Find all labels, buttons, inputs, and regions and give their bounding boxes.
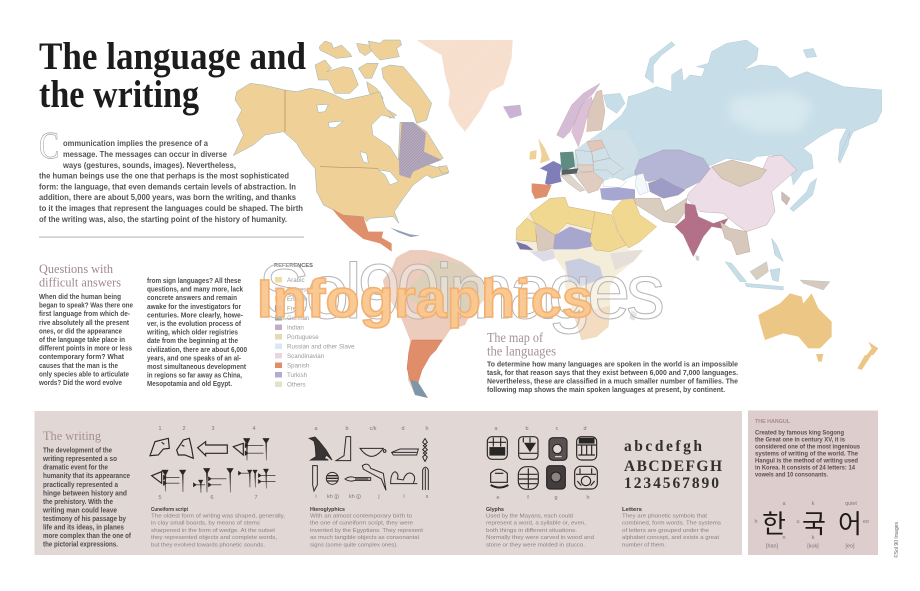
labels: cuneiform numbers: 4 bbox=[252, 426, 256, 432]
labels: Hangul phonetics: [kuk] bbox=[807, 544, 819, 550]
text: glyphs: represent a word, a syllable or, even, bbox=[486, 521, 586, 527]
text: glyphs: Normally they were carved in wood and bbox=[486, 535, 594, 541]
labels: glyph letters bbox=[494, 426, 590, 501]
icon: hieroglyphs bbox=[309, 437, 428, 491]
legend: references: German bbox=[287, 315, 310, 322]
copyright credit: ©Sol 90 Images bbox=[893, 522, 900, 558]
text: writing description: writing man could leave bbox=[42, 508, 117, 514]
text: hieroglyphics: signs (some quite complex ones). bbox=[310, 542, 398, 548]
labels: cuneiform numbers: 3 bbox=[212, 426, 214, 432]
text: Hangul description: vowels and 10 consonants. bbox=[755, 472, 828, 479]
panel: questions with difficult answers: centuries. More clearly, howe- bbox=[147, 312, 244, 319]
intro text bbox=[39, 125, 303, 224]
map: Eastern Europe bbox=[560, 130, 640, 201]
panel: questions with difficult answers bbox=[38, 261, 247, 388]
text: cuneiform script: in clay small boards, by means of stems bbox=[151, 521, 260, 527]
specimen: alphabet letters: abcdefgh bbox=[624, 438, 702, 455]
heading: the writing: The writing bbox=[43, 429, 102, 443]
panel: questions with difficult answers: of the language take place in bbox=[39, 337, 125, 344]
labels: Hangul phonetics: k bbox=[812, 501, 815, 507]
labels: hieroglyph sounds: b bbox=[346, 426, 348, 432]
text: hieroglyphics: With an almost contemporary birth to bbox=[310, 514, 412, 520]
panel: questions with difficult answers: ver, is the evolution process of bbox=[147, 321, 242, 328]
text: cuneiform script: but they evolved towards phonetic sounds. bbox=[151, 542, 265, 548]
panel: questions with difficult answers: contemporary form? What bbox=[39, 354, 125, 361]
labels: Hangul phonetics: k bbox=[812, 535, 815, 541]
labels: hieroglyph sounds: l bbox=[403, 494, 405, 500]
heading: map bbox=[487, 330, 556, 358]
text: writing description bbox=[42, 448, 132, 548]
text: glyphs: Glyphs bbox=[486, 507, 504, 513]
labels: glyph letters: d bbox=[584, 426, 586, 432]
panel: questions with difficult answers: concrete answers and remain bbox=[147, 295, 237, 302]
panel: the writing bbox=[34, 411, 742, 555]
text: cuneiform script: they represented objects and complete words, bbox=[151, 535, 277, 541]
legend: references: Portuguese bbox=[287, 334, 319, 341]
text: glyphs: Used by the Mayans, each could bbox=[486, 514, 573, 520]
legend: references: Others bbox=[287, 382, 306, 388]
panel: questions with difficult answers: writing, which older registries bbox=[146, 330, 238, 337]
text: letters: alphabet concept, and exists a great bbox=[622, 535, 719, 541]
heading: questions bbox=[39, 261, 121, 290]
labels: glyph letters: g bbox=[554, 495, 558, 501]
labels: Hangul phonetics: u bbox=[796, 519, 800, 525]
text: cuneiform script: Cuneiform script bbox=[151, 507, 188, 513]
legend: references: French bbox=[287, 306, 307, 312]
text: cuneiform script: sharpened in the form of wedge. At the outset bbox=[151, 528, 275, 534]
specimen: alphabet letters: ABCDEFGH bbox=[624, 458, 722, 475]
text: glyphs: stone or they were molded in stucco. bbox=[486, 542, 585, 548]
labels: cuneiform numbers: 7 bbox=[254, 495, 258, 501]
map: Africa bbox=[515, 197, 643, 340]
text: writing description: life and its ideas, in planes bbox=[43, 524, 124, 532]
panel: questions with difficult answers: ones, or did the appearance bbox=[39, 328, 122, 335]
labels: hieroglyph sounds: i bbox=[315, 494, 317, 500]
labels: hieroglyph sounds: kh (j) bbox=[349, 494, 361, 500]
text: hieroglyphics: as much tangible objects as consonantal bbox=[310, 535, 419, 541]
map: Australia and New Zealand bbox=[758, 293, 878, 370]
text: hieroglyphics: Hieroglyphics bbox=[310, 507, 345, 513]
text: writing description: testimony of his passage by bbox=[43, 516, 126, 523]
text: writing description: more complex than the one of bbox=[43, 533, 132, 540]
text: Hangul description: systems of writing of the world. The bbox=[755, 451, 859, 458]
text: glyphs: both things in different situations. bbox=[486, 528, 577, 534]
labels: glyph letters: a bbox=[494, 426, 498, 432]
text: hieroglyphics: invented by the Egyptians. They represent bbox=[310, 528, 423, 534]
panel: questions with difficult answers: only species able to articulate bbox=[39, 371, 129, 378]
text: writing description: the pictorial expressions. bbox=[43, 542, 118, 548]
panel: questions with difficult answers: from sign languages? All these bbox=[147, 278, 241, 285]
drop cap: C bbox=[39, 125, 59, 167]
text: Hangul description bbox=[755, 430, 861, 479]
heading: questions: difficult answers bbox=[39, 274, 121, 290]
text: writing description: practically represented a bbox=[43, 482, 118, 489]
panel: the Hangul bbox=[748, 410, 878, 555]
title bbox=[39, 35, 306, 116]
labels: cuneiform numbers: 6 bbox=[210, 495, 214, 501]
labels: glyph letters: h bbox=[586, 495, 590, 501]
legend: references: Chinese bbox=[287, 286, 310, 294]
panel: questions with difficult answers: Mesopotamia and old Egypt. bbox=[147, 381, 232, 388]
specimen: alphabet letters: 1234567890 bbox=[624, 475, 719, 492]
text: the map of the languages bbox=[487, 330, 738, 394]
Korean characters: 한 bbox=[762, 509, 786, 539]
text: Hangul description: the Great one in century XV, it is bbox=[755, 436, 846, 444]
panel: questions with difficult answers: first language from which de- bbox=[39, 311, 131, 318]
intro text: message. The messages can occur in diverse bbox=[63, 149, 227, 159]
labels: Hangul phonetics: [han] bbox=[766, 544, 778, 550]
heading: the Hangul: THE HANGUL bbox=[755, 419, 791, 425]
text: writing description: writing represented a so bbox=[42, 456, 117, 463]
labels: Hangul phonetics: [eo] bbox=[846, 544, 855, 550]
text: the map of the languages: task, for that reason says that they exist between 6,000 and 7,000 languages. bbox=[487, 370, 738, 377]
text: writing description: the prehistory. With the bbox=[43, 499, 113, 506]
panel: questions with difficult answers: began to speak? Was there one bbox=[39, 303, 133, 310]
Korean characters: 국 bbox=[802, 509, 826, 539]
map: North America bbox=[233, 40, 449, 223]
labels: Hangul phonetics: quiet bbox=[845, 501, 857, 507]
map: Asia bbox=[597, 40, 882, 290]
icon: cuneiform signs bbox=[150, 438, 275, 493]
intro text: of the writing was, also, the starting point of the history of humanity. bbox=[39, 214, 287, 224]
watermark: Infographics: Infographics bbox=[257, 269, 593, 329]
map: Quebec bbox=[399, 122, 442, 178]
panel: questions with difficult answers: causes that the man is the bbox=[39, 363, 118, 370]
text: cuneiform script: The oldest form of writing was shaped, generally, bbox=[151, 514, 285, 520]
intro text: form: the language, that even demands certain levels of abstraction. In bbox=[39, 181, 296, 191]
labels: Hangul phonetics: a bbox=[782, 501, 786, 507]
labels: Hangul phonetics: n bbox=[782, 535, 786, 541]
title: the writing bbox=[39, 73, 199, 116]
labels: hieroglyph sounds: kh (j) bbox=[327, 494, 339, 500]
labels: hieroglyph sounds: c/k bbox=[370, 426, 377, 432]
panel: questions with difficult answers: most simultaneous development bbox=[147, 364, 247, 371]
panel: questions with difficult answers: When did the human being bbox=[39, 294, 121, 301]
panel: questions with difficult answers: words? Did the word evolve bbox=[38, 380, 122, 387]
legend: references: Russian and other Slave bbox=[287, 344, 355, 350]
panel: questions with difficult answers: rive absolutely all the present bbox=[39, 320, 130, 327]
text: writing description: hinge between history and bbox=[43, 490, 127, 498]
text: letters: of letters are grouped under the bbox=[622, 528, 709, 534]
labels: hieroglyph sounds: d bbox=[402, 426, 404, 432]
text: Hangul description: Created by famous king Sogong bbox=[755, 430, 844, 437]
specimen: alphabet letters bbox=[624, 438, 722, 492]
labels: hieroglyph sounds: a bbox=[314, 426, 318, 432]
labels: cuneiform numbers bbox=[158, 426, 258, 501]
text: letters: number of them. bbox=[622, 542, 666, 548]
intro text: ommunication implies the presence of a bbox=[63, 138, 208, 148]
legend: references: English bbox=[287, 296, 308, 303]
heading: map: The map of bbox=[487, 330, 543, 345]
legend: references: REFERENCES bbox=[274, 263, 314, 269]
panel: questions with difficult answers: in regions so far away as China, bbox=[147, 373, 242, 380]
intro text: addition, there are about 5,000 years, was born the writing, and thanks bbox=[39, 192, 296, 202]
labels: glyph letters: e bbox=[496, 495, 500, 501]
labels: Hangul phonetics bbox=[754, 501, 869, 550]
text: writing description: humanity that its appearance bbox=[43, 473, 130, 480]
text: letters: Letters bbox=[622, 507, 642, 513]
panel: questions with difficult answers: civilization, there are about 6,000 bbox=[147, 347, 247, 354]
icon: Mayan glyphs bbox=[487, 437, 597, 489]
labels: cuneiform numbers: 2 bbox=[182, 426, 186, 432]
labels: hieroglyph sounds bbox=[314, 426, 429, 500]
map: Western Europe bbox=[503, 83, 605, 199]
labels: hieroglyph sounds: s bbox=[426, 494, 429, 500]
intro text: the human beings use the one that perhaps is the most sophisticated bbox=[39, 171, 289, 181]
intro text: to it the images that represent the languages could be shaped. The birth bbox=[39, 203, 303, 213]
heading: questions: Questions with bbox=[39, 261, 113, 276]
heading: map: the languages bbox=[487, 344, 556, 358]
text: letters: combined, form words. The systems bbox=[622, 521, 721, 527]
text: the map of the languages: To determine how many languages are spoken in the world is an impossible bbox=[487, 362, 738, 368]
labels: glyph letters: c bbox=[556, 426, 559, 432]
legend: references bbox=[274, 263, 355, 388]
text: writing description: dramatic event for the bbox=[43, 464, 108, 472]
legend: references: Arabic bbox=[287, 277, 305, 284]
text: cuneiform script bbox=[151, 507, 285, 548]
watermark: Sol90images: Sol90images bbox=[258, 247, 665, 335]
text: the map of the languages: following map shows the main spoken languages at present, by continent. bbox=[487, 387, 725, 394]
text: letters bbox=[622, 507, 721, 548]
intro text: ways (gestures, sounds, images). Nevertheless, bbox=[62, 160, 236, 170]
panel: questions with difficult answers: awake for the investigators for bbox=[147, 304, 241, 311]
text: glyphs bbox=[486, 507, 594, 548]
panel: questions with difficult answers: years, and one speaks of an al- bbox=[147, 355, 242, 362]
labels: hieroglyph sounds: h bbox=[426, 426, 428, 432]
map: Greenland bbox=[417, 40, 513, 132]
Korean characters: 어 bbox=[838, 509, 862, 539]
legend: references: Indian bbox=[287, 324, 304, 332]
text: hieroglyphics: the one of cuneiform script, they were bbox=[310, 521, 413, 527]
title: The language and bbox=[39, 35, 306, 78]
labels: cuneiform numbers: 1 bbox=[158, 426, 162, 432]
map: South America bbox=[383, 250, 487, 398]
legend: references: Spanish bbox=[287, 362, 310, 370]
panel: questions with difficult answers: date from the beginning at the bbox=[147, 338, 238, 345]
text: Hangul description: in Korea. It consists of 24 letters: 14 bbox=[755, 465, 856, 472]
labels: hieroglyph sounds: j bbox=[377, 494, 380, 500]
text: Hangul description: Hangul is the method of writing used bbox=[755, 458, 858, 465]
map: Mexico and Central America bbox=[332, 208, 420, 252]
text: the map of the languages: Nevertheless, these are classified in a much smaller number of families. The bbox=[487, 378, 738, 386]
legend: references: Scandinavian bbox=[287, 353, 325, 360]
panel: questions with difficult answers: questions, and many more, lack bbox=[147, 287, 243, 294]
labels: cuneiform numbers: 5 bbox=[158, 495, 162, 501]
world map bbox=[233, 40, 882, 398]
text: writing description: The development of the bbox=[43, 448, 112, 454]
labels: Hangul phonetics: eo bbox=[863, 519, 869, 525]
legend: references: Turkish bbox=[287, 372, 308, 379]
labels: glyph letters: b bbox=[526, 426, 528, 432]
text: hieroglyphics bbox=[310, 507, 423, 548]
text: Hangul description: considered one of the most ingenious bbox=[755, 444, 861, 451]
panel: questions with difficult answers: different points in more or less bbox=[39, 346, 132, 353]
labels: Hangul phonetics: h bbox=[754, 519, 758, 525]
Korean characters bbox=[762, 509, 862, 539]
labels: glyph letters: f bbox=[527, 495, 529, 501]
text: letters: They are phonetic symbols that bbox=[622, 514, 707, 520]
